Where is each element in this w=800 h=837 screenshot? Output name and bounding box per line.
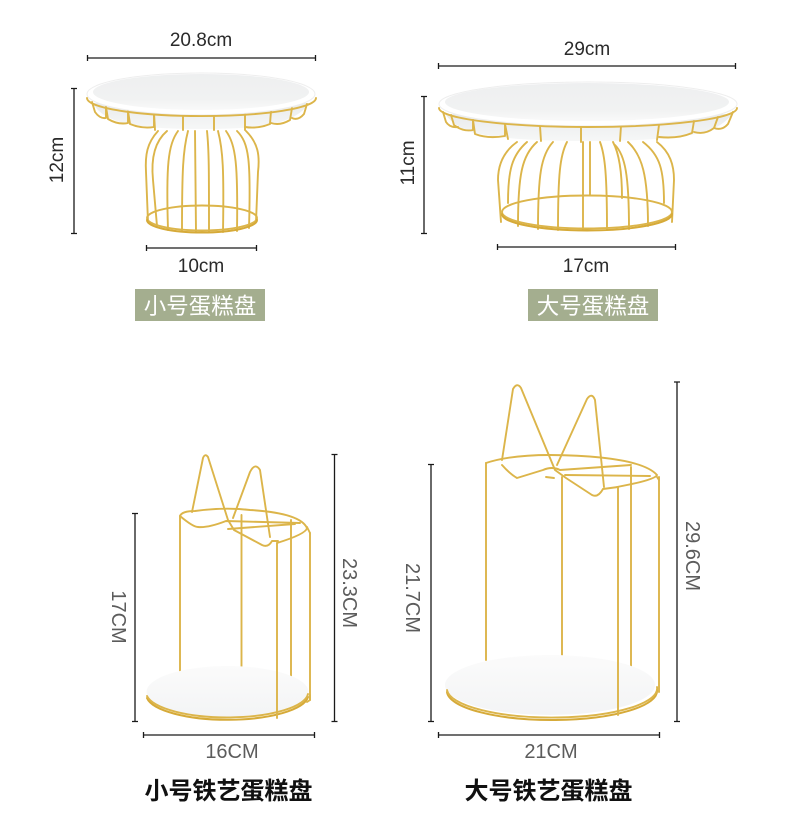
dimension: stand total height 29.6CM (674, 382, 703, 722)
dimension: height 12cm (47, 88, 77, 234)
dimension: base width 17cm (498, 244, 676, 277)
heading: large iron cake stand: 大号铁艺蛋糕盘 (464, 778, 632, 805)
dimension: stand total height 29.6CM: 29.6CM (681, 521, 703, 591)
heading: small iron cake stand: 小号铁艺蛋糕盘 (144, 778, 312, 805)
panel: large iron cake stand (401, 382, 703, 805)
panel: small cake plate (47, 30, 316, 321)
icon: large iron stand with cat ears (445, 385, 659, 720)
dimension: plate width 20.8cm (88, 30, 316, 61)
icon: small iron stand with cat ears (146, 455, 310, 720)
dimension: plate width 29cm (438, 39, 736, 69)
dimension: stand inner height 21.7CM: 21.7CM (401, 563, 423, 633)
dimension: height 11cm: 11cm (398, 140, 419, 186)
dimension: height 12cm: 12cm (47, 137, 68, 183)
dimension: plate width 20.8cm: 20.8cm (170, 30, 232, 51)
panel: small iron cake stand (107, 454, 360, 805)
label: large cake plate (528, 289, 658, 321)
dimension: stand inner height 17CM (107, 514, 138, 722)
icon: large cake plate with gold cage stand (439, 82, 737, 230)
label: small cake plate: 小号蛋糕盘 (144, 294, 256, 319)
dimension: stand width 16CM (144, 732, 314, 763)
dimension: stand width 16CM: 16CM (205, 741, 259, 763)
label: small cake plate (135, 289, 265, 321)
dimension: base width 10cm: 10cm (178, 256, 224, 277)
dimension: stand width 21CM: 21CM (524, 741, 578, 763)
dimension: height 11cm (398, 96, 427, 234)
dimension: base width 10cm (146, 245, 256, 277)
icon: small cake plate with gold cage stand (87, 73, 316, 232)
panel: large cake plate (398, 39, 737, 321)
dimension: stand total height 23.3CM (332, 454, 360, 722)
dimension: stand inner height 21.7CM (401, 464, 434, 722)
dimension: stand total height 23.3CM: 23.3CM (338, 558, 360, 628)
dimension: plate width 29cm: 29cm (564, 39, 610, 60)
label: large cake plate: 大号蛋糕盘 (537, 294, 649, 319)
dimension: base width 17cm: 17cm (563, 256, 609, 277)
dimension: stand inner height 17CM: 17CM (107, 590, 129, 644)
dimension: stand width 21CM (438, 732, 660, 763)
